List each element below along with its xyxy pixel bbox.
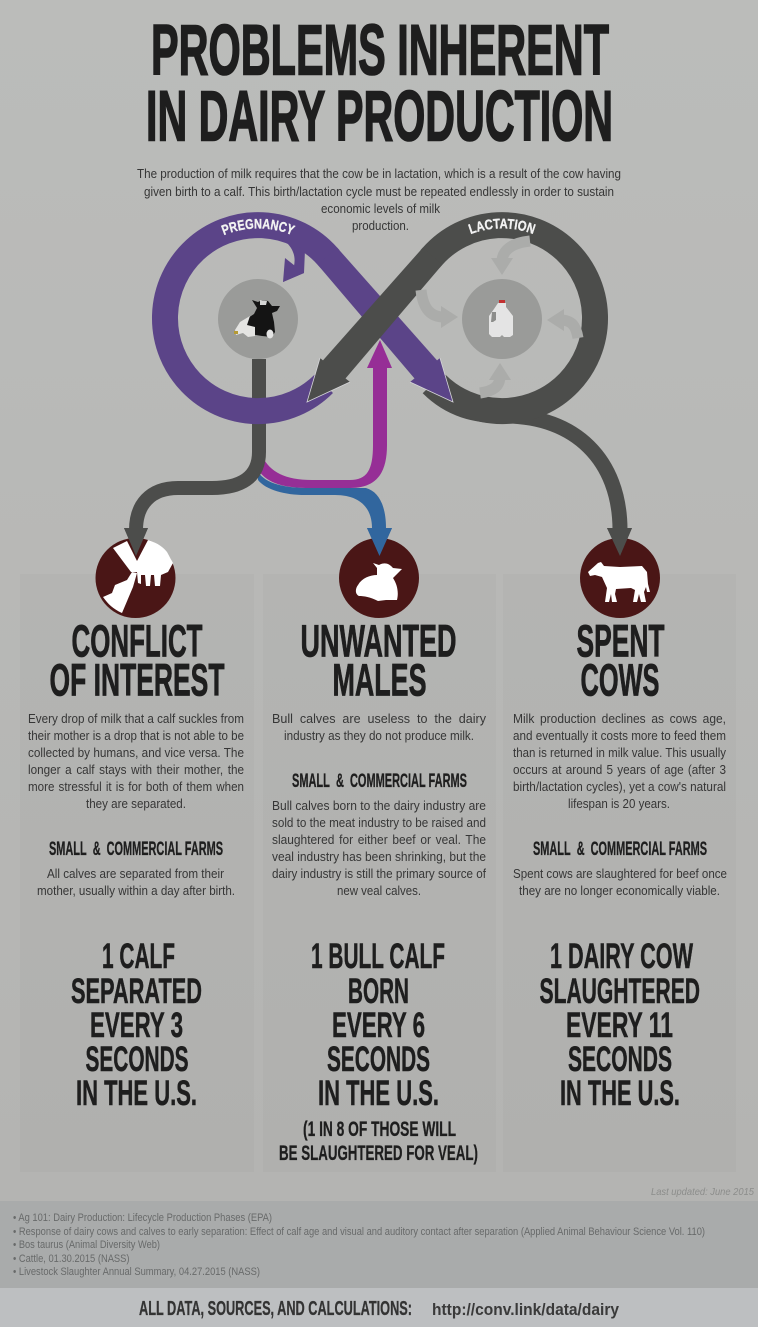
- label: lactation: LACTATION: [468, 218, 536, 234]
- icon: milk jug: [489, 300, 513, 337]
- heading: unwanted males: MALES: [332, 654, 426, 706]
- text block: farms description: new veal calves.: [337, 883, 421, 898]
- statistic: bull calf born: [311, 936, 445, 1113]
- text block: farms description: Bull calves born to the dairy industry are: [272, 798, 486, 813]
- statistic: calf separated: [71, 936, 202, 1113]
- text block: conflict description: more stressful it is for both of them when: [28, 779, 244, 794]
- panel: conflict of interest text: [28, 616, 244, 1113]
- heading: spent cows: [576, 616, 665, 706]
- text block: spent description: occurs at around 5 years of age (after 3: [513, 762, 726, 777]
- statistic: calf separated: 1 CALF: [102, 936, 175, 976]
- arrow: spent cow path: [428, 388, 632, 556]
- text block: farms description: sold to the meat industry to be raised and: [272, 815, 486, 830]
- statistic: bull calf born: EVERY 6: [332, 1005, 425, 1045]
- text block: source list: • Ag 101: Dairy Production: Lifecycle Production Phases (EPA): [13, 1212, 272, 1224]
- arrow: magenta return path: [258, 340, 392, 488]
- heading: conflict of interest: OF INTEREST: [50, 654, 225, 706]
- intro text: [137, 166, 621, 233]
- statistic: dairy cow slaughtered: IN THE U.S.: [560, 1073, 680, 1113]
- text block: conflict description: collected by humans, and vice versa. The: [28, 745, 244, 760]
- statistic: dairy cow slaughtered: [540, 936, 700, 1113]
- arrow: pregnancy loop: [165, 225, 439, 411]
- intro text: economic levels of milk: [321, 201, 441, 216]
- footer label: ALL DATA, SOURCES, AND CALCULATIONS:: [139, 1297, 412, 1320]
- heading: unwanted males: UNWANTED: [300, 616, 456, 666]
- text block: conflict description: they are separated.: [86, 796, 186, 811]
- intro text: production.: [352, 218, 409, 233]
- text block: farms description: veal industry has been shrinking, but the: [272, 849, 486, 864]
- arrow: lactation ring: [321, 225, 595, 411]
- arrow: milk left: [421, 290, 458, 328]
- statistic: bull calf born: IN THE U.S.: [318, 1073, 439, 1113]
- circle: calf: [218, 279, 298, 359]
- text block: spent description: than is returned in milk value. This usually: [513, 745, 727, 760]
- footer link: http://conv.link/data/dairy: [432, 1300, 619, 1319]
- text block: farms description: slaughtered for either beef or veal. The: [272, 832, 486, 847]
- text block: farms description: [37, 866, 235, 898]
- panel: unwanted males background: [263, 574, 496, 1172]
- text block: males description: Bull calves are useless to the dairy: [272, 711, 487, 726]
- statistic note: veal: [279, 1117, 478, 1165]
- text block: farms description: All calves are separated from their: [47, 866, 225, 881]
- circle: milk: [462, 279, 542, 359]
- text block: conflict description: longer a calf stays with their mother, the: [28, 762, 244, 777]
- statistic note: veal: BE SLAUGHTERED FOR VEAL): [279, 1141, 478, 1165]
- text block: spent description: Milk production declines as cows age,: [513, 711, 726, 726]
- text block: conflict description: their mother is a drop that is not able to be: [28, 728, 244, 743]
- text block: males description: industry as they do not produce milk.: [284, 728, 474, 743]
- text block: farms description: they are no longer economically viable.: [519, 883, 720, 898]
- title: [146, 12, 613, 156]
- statistic: calf separated: EVERY 3: [90, 1005, 183, 1045]
- panel: sources: [0, 1201, 758, 1288]
- text block: farms description: [272, 798, 486, 898]
- arrowhead: pregnancy: [410, 358, 453, 402]
- panel: spent cows background: [503, 574, 736, 1172]
- arrow: milk bottom: [480, 363, 511, 393]
- statistic: calf separated: SECONDS: [86, 1039, 188, 1079]
- footer: [0, 1288, 758, 1327]
- arrow: milk right: [547, 309, 578, 338]
- subheading: farms: SMALL & COMMERCIAL FARMS: [49, 839, 223, 860]
- heading: spent cows: COWS: [580, 654, 660, 706]
- heading: conflict of interest: CONFLICT: [72, 616, 203, 666]
- icon: spent cow: [580, 528, 660, 618]
- text block: males description: [272, 711, 487, 743]
- heading: unwanted males: [300, 616, 456, 706]
- text block: spent description: birth/lactation cycles), yet a cow's natural: [513, 779, 726, 794]
- label: pregnancy: PREGNANCY: [220, 218, 296, 236]
- text block: spent description: and eventually it costs more to feed them: [513, 728, 726, 743]
- text block: farms description: [513, 866, 727, 898]
- text block: farms description: mother, usually within a day after birth.: [37, 883, 235, 898]
- arrow: milk top: [491, 241, 530, 275]
- intro text: given birth to a calf. This birth/lactation cycle must be repeated endlessly in order to sustain: [144, 184, 614, 199]
- icon: unwanted male lamb: [339, 528, 419, 618]
- text block: farms description: Spent cows are slaughtered for beef once: [513, 866, 727, 881]
- text block: conflict description: [28, 711, 244, 811]
- arrowhead: lactation: [307, 358, 350, 402]
- statistic: bull calf born: 1 BULL CALF: [311, 936, 445, 976]
- arrow: calf separation path: [124, 359, 259, 556]
- heading: spent cows: SPENT: [576, 616, 665, 666]
- statistic: calf separated: SEPARATED: [71, 971, 202, 1011]
- icon: calf: [234, 300, 280, 338]
- panel: unwanted males text: [272, 616, 487, 1165]
- statistic: dairy cow slaughtered: SECONDS: [568, 1039, 672, 1079]
- text block: spent description: lifespan is 20 years.: [568, 796, 670, 811]
- heading: conflict of interest: [50, 616, 225, 706]
- panel: conflict of interest background: [20, 574, 254, 1172]
- statistic: bull calf born: BORN: [348, 971, 409, 1011]
- text block: farms description: dairy industry is still the primary source of: [272, 866, 486, 881]
- statistic: dairy cow slaughtered: EVERY 11: [566, 1005, 673, 1045]
- subheading: farms: SMALL & COMMERCIAL FARMS: [292, 771, 467, 792]
- text block: conflict description: Every drop of milk that a calf suckles from: [28, 711, 244, 726]
- intro text: The production of milk requires that the cow be in lactation, which is a result of the cow having: [137, 166, 621, 181]
- statistic note: veal: (1 IN 8 OF THOSE WILL: [303, 1117, 456, 1141]
- text block: source list: • Livestock Slaughter Annual Summary, 04.27.2015 (NASS): [13, 1266, 260, 1278]
- diagram: lifecycle loop: [124, 212, 632, 539]
- statistic: bull calf born: SECONDS: [327, 1039, 430, 1079]
- panel: spent cows text: [513, 616, 727, 1113]
- text block: source list: • Cattle, 01.30.2015 (NASS): [13, 1253, 130, 1265]
- arrow: blue male calf path: [258, 472, 392, 556]
- text block: spent description: [513, 711, 727, 811]
- statistic: calf separated: IN THE U.S.: [76, 1073, 197, 1113]
- text block: source list: [13, 1212, 705, 1278]
- icon: conflict of interest: [96, 528, 176, 618]
- text block: source list: • Bos taurus (Animal Diversity Web): [13, 1239, 160, 1251]
